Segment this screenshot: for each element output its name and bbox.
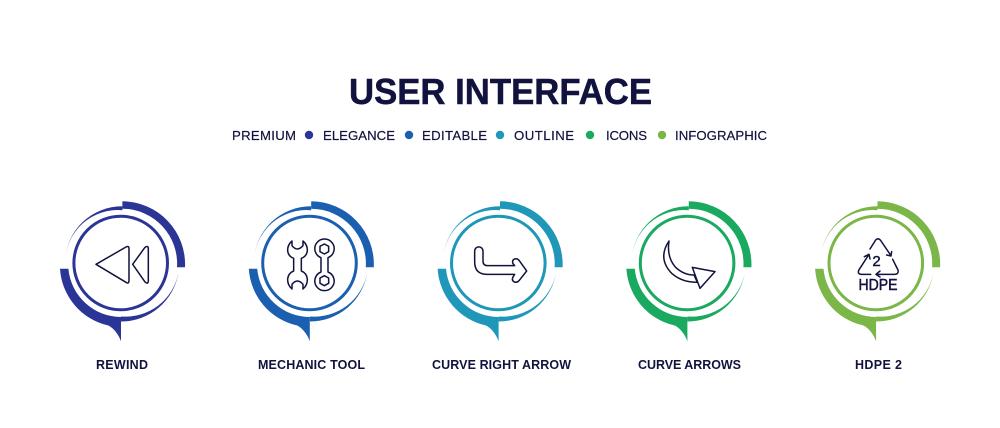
item: hdpe 2: [815, 201, 940, 372]
item: rewind: [60, 201, 185, 372]
item: mechanic tool: [249, 201, 374, 372]
tagline row: ELEGANCE: [323, 128, 395, 143]
label: CURVE ARROWS: [638, 358, 741, 372]
badge: mechanic tool ring: [249, 201, 374, 341]
icon: curve arrow: [664, 241, 715, 288]
badge: hdpe ring: [815, 201, 940, 341]
icon: recycling hdpe 2: [858, 239, 898, 294]
badge: curve arrows ring: [626, 201, 751, 341]
tagline row: PREMIUM: [232, 128, 296, 143]
tagline row: EDITABLE: [422, 128, 487, 143]
label: REWIND: [96, 358, 148, 372]
title: USER INTERFACE: [349, 71, 652, 112]
badge: rewind ring: [60, 201, 185, 341]
icon: wrench and spanner: [288, 239, 334, 291]
item: curve right arrow: [432, 201, 571, 372]
tagline row: [232, 128, 767, 143]
tagline row: ICONS: [606, 128, 647, 143]
label: HDPE 2: [855, 358, 902, 372]
icon: recycling hdpe 2: 2: [872, 253, 881, 270]
item: curve arrows: [626, 201, 751, 372]
label: MECHANIC TOOL: [258, 358, 365, 372]
icon: curve right arrow: [475, 247, 527, 282]
label: CURVE RIGHT ARROW: [432, 358, 571, 372]
icon: recycling hdpe 2: HDPE: [858, 277, 898, 294]
icon: rewind: [96, 246, 148, 283]
tagline row: INFOGRAPHIC: [675, 128, 767, 143]
tagline row: OUTLINE: [514, 128, 574, 143]
badge: curve right arrow ring: [438, 201, 563, 341]
